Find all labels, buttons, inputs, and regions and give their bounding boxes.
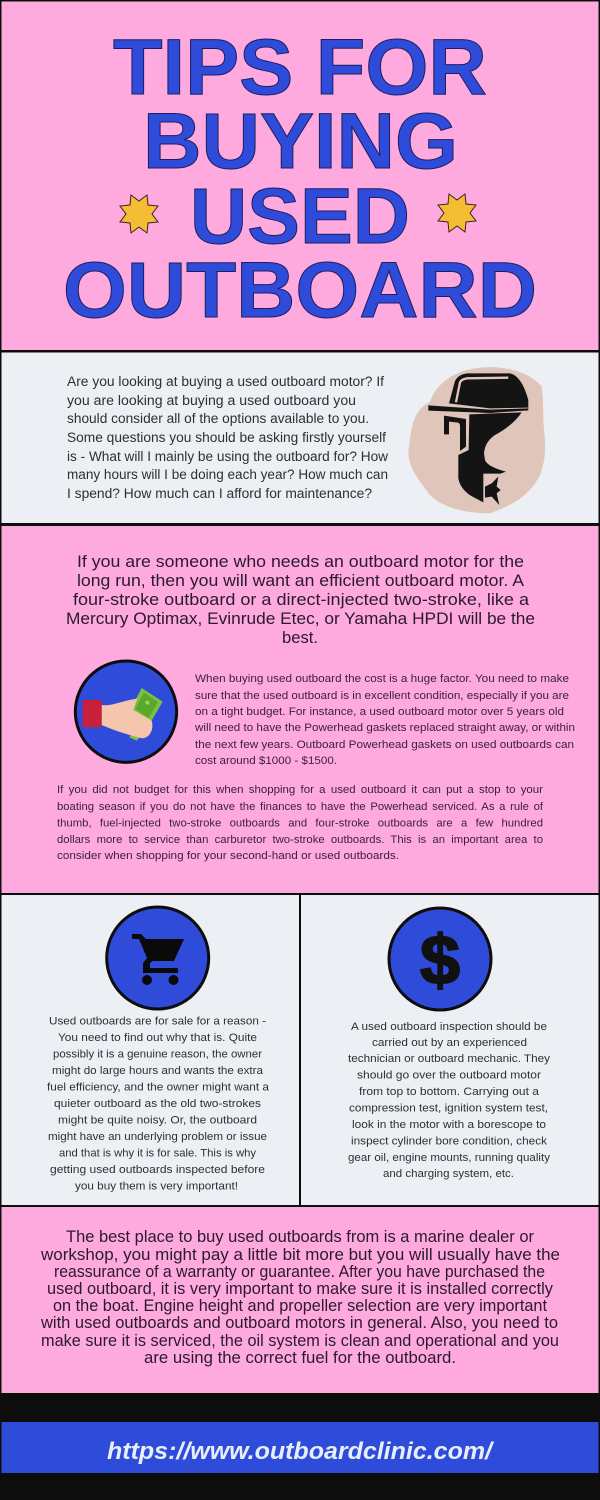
cost paragraph: cost around $1000 - $1500. (195, 755, 337, 767)
heading text: four-stroke outboard or a direct-injected two-stroke, like a (73, 590, 530, 609)
icon: shopping cart (107, 907, 209, 1009)
right column text: compression test, ignition system test, (349, 1102, 548, 1114)
budget paragraph: boating season if you do not have the finances to have the Powerhead serviced. As a rule of (57, 801, 544, 813)
title (63, 22, 537, 334)
heading text (66, 552, 535, 647)
where to buy text: The best place to buy used outboards from is a marine dealer or (66, 1228, 535, 1246)
panel: intro (2, 352, 598, 523)
icon: dollar (389, 908, 491, 1010)
panel: title (2, 2, 598, 350)
right column text: should go over the outboard motor (357, 1070, 541, 1082)
right column text: and charging system, etc. (383, 1168, 514, 1180)
where to buy text: with used outboards and outboard motors in general. Also, you need to (40, 1314, 558, 1332)
left column text: fuel efficiency, and the owner might want a (47, 1082, 270, 1094)
icon: hand with money (75, 661, 177, 762)
cost paragraph: will need to have the Powerhead gaskets replaced straight away, or within (194, 722, 575, 734)
icon: outboard motor (408, 367, 545, 513)
where to buy text (40, 1228, 560, 1367)
heading text: If you are someone who needs an outboard motor for the (77, 552, 524, 571)
left column text: might be quite noisy. Or, the outboard (58, 1114, 257, 1126)
intro text: Some questions you should be asking firstly yourself (67, 430, 386, 446)
budget paragraph (57, 784, 544, 862)
title: USED (190, 171, 410, 260)
left column text: You need to find out why that is. Quite (58, 1032, 257, 1044)
intro text (67, 374, 389, 502)
budget paragraph: thumb, fuel-injected two-stroke outboards and four-stroke outboards are a few hundred (57, 818, 543, 830)
cost paragraph: When buying used outboard the cost is a huge factor. You need to make (195, 673, 569, 685)
intro text: is - What will I mainly be using the outboard for? How (67, 449, 389, 465)
cost paragraph: on a tight budget. For instance, a used outboard motor over 5 years old (195, 706, 564, 718)
panel: website link (2, 1422, 598, 1473)
budget paragraph: consider when shopping for your second-hand or used outboards. (57, 850, 399, 862)
right column text: A used outboard inspection should be (351, 1021, 547, 1033)
title: BUYING (143, 96, 458, 185)
right column text (348, 1021, 551, 1180)
budget paragraph: dollars more to service than carburetor two-stroke outboards. This is an important area to (57, 834, 543, 846)
where to buy text: workshop, you might pay a little bit more but you will usually have the (40, 1246, 560, 1264)
intro text: Are you looking at buying a used outboard motor? If (67, 374, 384, 390)
icon: dollar: $ (420, 921, 460, 999)
right column text: from top to bottom. Carrying out a (359, 1086, 540, 1098)
intro text: many hours will I be doing each year? How much can (67, 467, 388, 483)
cost paragraph: the next few years. Outboard Powerhead gaskets on used outboards can (195, 739, 574, 751)
left column text: getting used outboards inspected before (50, 1164, 265, 1176)
left column text: possibly it is a genuine reason, the owner (53, 1048, 262, 1060)
right column text: look in the motor with a borescope to (352, 1119, 546, 1131)
intro text: I spend? How much can I afford for maintenance? (67, 486, 372, 502)
title: OUTBOARD (63, 245, 537, 334)
right column text: inspect cylinder bore condition, check (351, 1136, 548, 1148)
website url: https://www.outboardclinic.com/ (107, 1438, 494, 1465)
intro text: should consider all of the options available to you. (67, 411, 369, 427)
cost paragraph (194, 673, 575, 767)
right column text: carried out by an experienced (372, 1037, 527, 1049)
left column text: might do large hours and wants the extra (52, 1065, 264, 1077)
panel: cost (2, 526, 598, 893)
icon: left star (120, 195, 158, 233)
title: TIPS FOR (113, 22, 487, 111)
budget paragraph: If you did not budget for this when shopping for a used outboard it can put a stop to your (57, 784, 543, 796)
left column text: and that is why it is for sale. This is why (59, 1148, 257, 1160)
right column text: gear oil, engine mounts, running quality (348, 1152, 551, 1164)
panel: used outboards reason (2, 895, 299, 1205)
left column text: might have an underlying problem or issue (48, 1131, 267, 1143)
where to buy text: are using the correct fuel for the outboard. (144, 1349, 456, 1367)
left column text (47, 1016, 270, 1192)
cost paragraph: sure that the used outboard is in excellent condition, especially if you are (195, 690, 569, 702)
heading text: Mercury Optimax, Evinrude Etec, or Yamaha HPDI will be the (66, 609, 535, 628)
panel: where to buy (2, 1207, 598, 1393)
left column text: quieter outboard as the old two-strokes (54, 1098, 262, 1110)
where to buy text: make sure it is serviced, the oil system is clean and operational and you (41, 1332, 559, 1350)
left column text: you buy them is very important! (75, 1180, 238, 1192)
where to buy text: on the boat. Engine height and propeller selection are very important (53, 1297, 547, 1315)
left column text: Used outboards are for sale for a reason - (49, 1016, 266, 1028)
panel: inspection (301, 895, 598, 1205)
intro text: you are looking at buying a used outboard you (67, 393, 356, 409)
icon: right star (438, 194, 476, 232)
where to buy text: reassurance of a warranty or guarantee. After you have purchased the (54, 1263, 545, 1281)
heading text: best. (282, 628, 318, 647)
where to buy text: used outboard, it is very important to make sure it is installed correctly (47, 1280, 554, 1298)
right column text: technician or outboard mechanic. They (348, 1053, 551, 1065)
heading text: long run, then you will want an efficient outboard motor. A (77, 571, 525, 590)
